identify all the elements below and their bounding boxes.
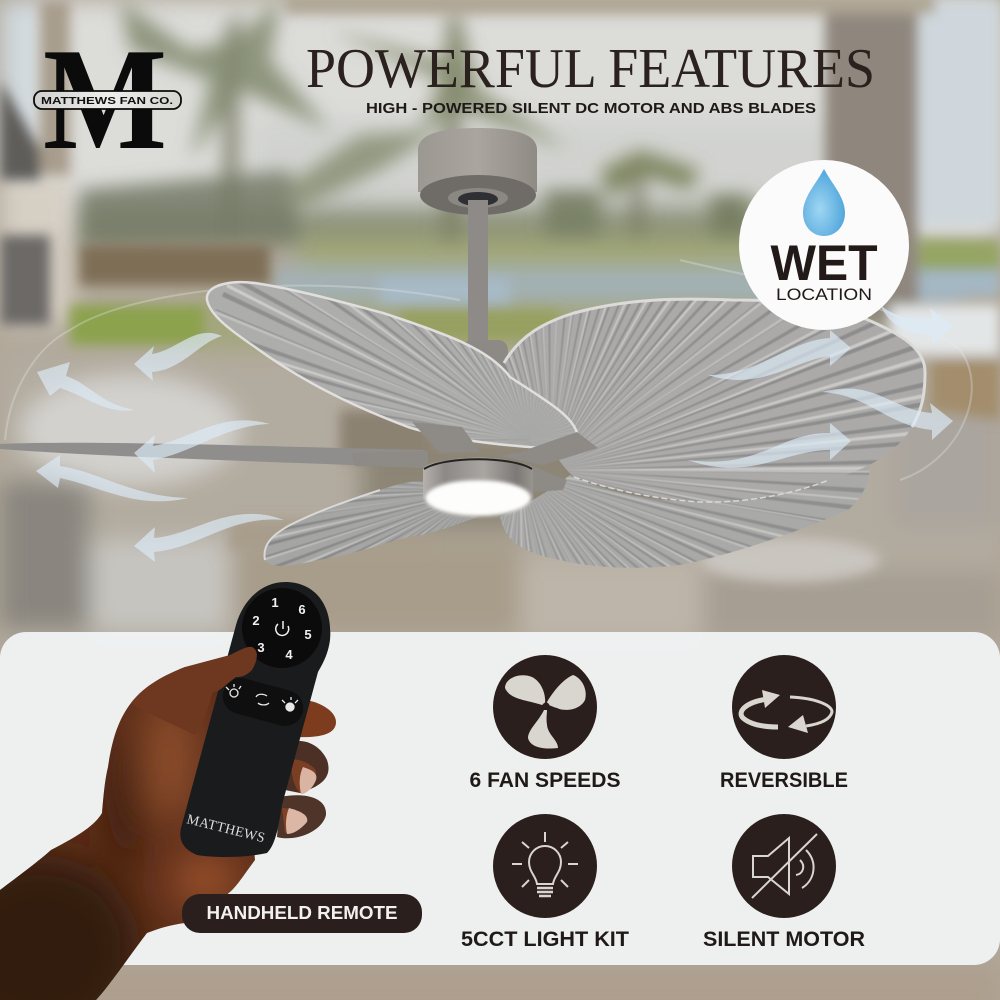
- remote dial numbers: 5: [304, 627, 312, 642]
- label: SILENT MOTOR: [703, 928, 865, 951]
- wet location badge: [739, 160, 909, 330]
- remote button row: [219, 674, 307, 730]
- feature: 6 fan speeds: [470, 655, 620, 792]
- air arrow: [37, 362, 135, 411]
- logo badge: MATTHEWS FAN CO.: [41, 95, 173, 107]
- ceiling fan: [0, 128, 935, 670]
- fan downrod: [468, 200, 488, 346]
- bottom features panel: [0, 632, 1000, 965]
- title: POWERFUL FEATURES: [306, 38, 875, 100]
- decorative air swirl lines: [5, 260, 972, 480]
- fan blade brackets: [352, 422, 598, 492]
- fan blade: rear right: [500, 465, 870, 568]
- air arrow: [134, 333, 222, 381]
- logo: [34, 18, 181, 180]
- remote dial numbers: 2: [252, 613, 260, 628]
- wet heading: WET: [770, 235, 878, 291]
- air arrow: [822, 388, 953, 440]
- icon: reversible arrows: [732, 655, 836, 759]
- hand holding remote: [0, 582, 336, 1000]
- air flow arrows: [36, 305, 953, 562]
- logo monogram: M: [43, 18, 167, 180]
- icon: water drop: [803, 169, 845, 236]
- label: REVERSIBLE: [720, 769, 848, 792]
- feature: reversible: [720, 655, 848, 792]
- fan blade: lower left: [265, 481, 478, 566]
- location label: LOCATION: [776, 285, 872, 304]
- hand: fingers: [277, 700, 336, 838]
- hand: thumb: [131, 647, 257, 735]
- remote button icons: [226, 684, 298, 711]
- feature: 5cct light kit: [461, 814, 629, 951]
- fan motor housing: [423, 458, 533, 498]
- remote dial numbers: 3: [257, 640, 265, 655]
- air arrow: [688, 423, 851, 468]
- air arrow: [880, 305, 953, 345]
- subtitle: HIGH - POWERED SILENT DC MOTOR AND ABS BLADES: [366, 100, 816, 117]
- label: 5CCT LIGHT KIT: [461, 928, 629, 951]
- fan blade: edge-on left: [0, 443, 425, 468]
- air arrow: [36, 455, 188, 501]
- remote dial numbers: 6: [298, 602, 306, 617]
- remote dial numbers: 4: [285, 647, 293, 662]
- fan blade: top left: [208, 284, 576, 446]
- air arrow: [134, 420, 270, 473]
- remote power icon: [276, 621, 289, 635]
- handheld remote label: [182, 894, 422, 933]
- remote brand text: MATTHEWS: [185, 812, 266, 846]
- air arrow: [134, 514, 284, 562]
- icon: light bulb: [493, 814, 597, 918]
- hand: palm and wrist: [0, 667, 255, 1000]
- label: 6 FAN SPEEDS: [470, 769, 620, 792]
- icon: fan: [493, 655, 597, 759]
- air arrow: [708, 330, 851, 380]
- logo badge: [34, 91, 181, 109]
- fan blade: right: [504, 300, 924, 502]
- remote body: [180, 582, 330, 857]
- remote speed dial: [242, 588, 322, 668]
- fan light: [425, 480, 531, 516]
- remote dial numbers: [252, 595, 312, 662]
- icon: muted speaker: [732, 814, 836, 918]
- feature: silent motor: [703, 814, 865, 951]
- handheld remote label: HANDHELD REMOTE: [206, 903, 398, 923]
- fan canopy: [418, 128, 537, 215]
- remote dial numbers: 1: [271, 595, 279, 610]
